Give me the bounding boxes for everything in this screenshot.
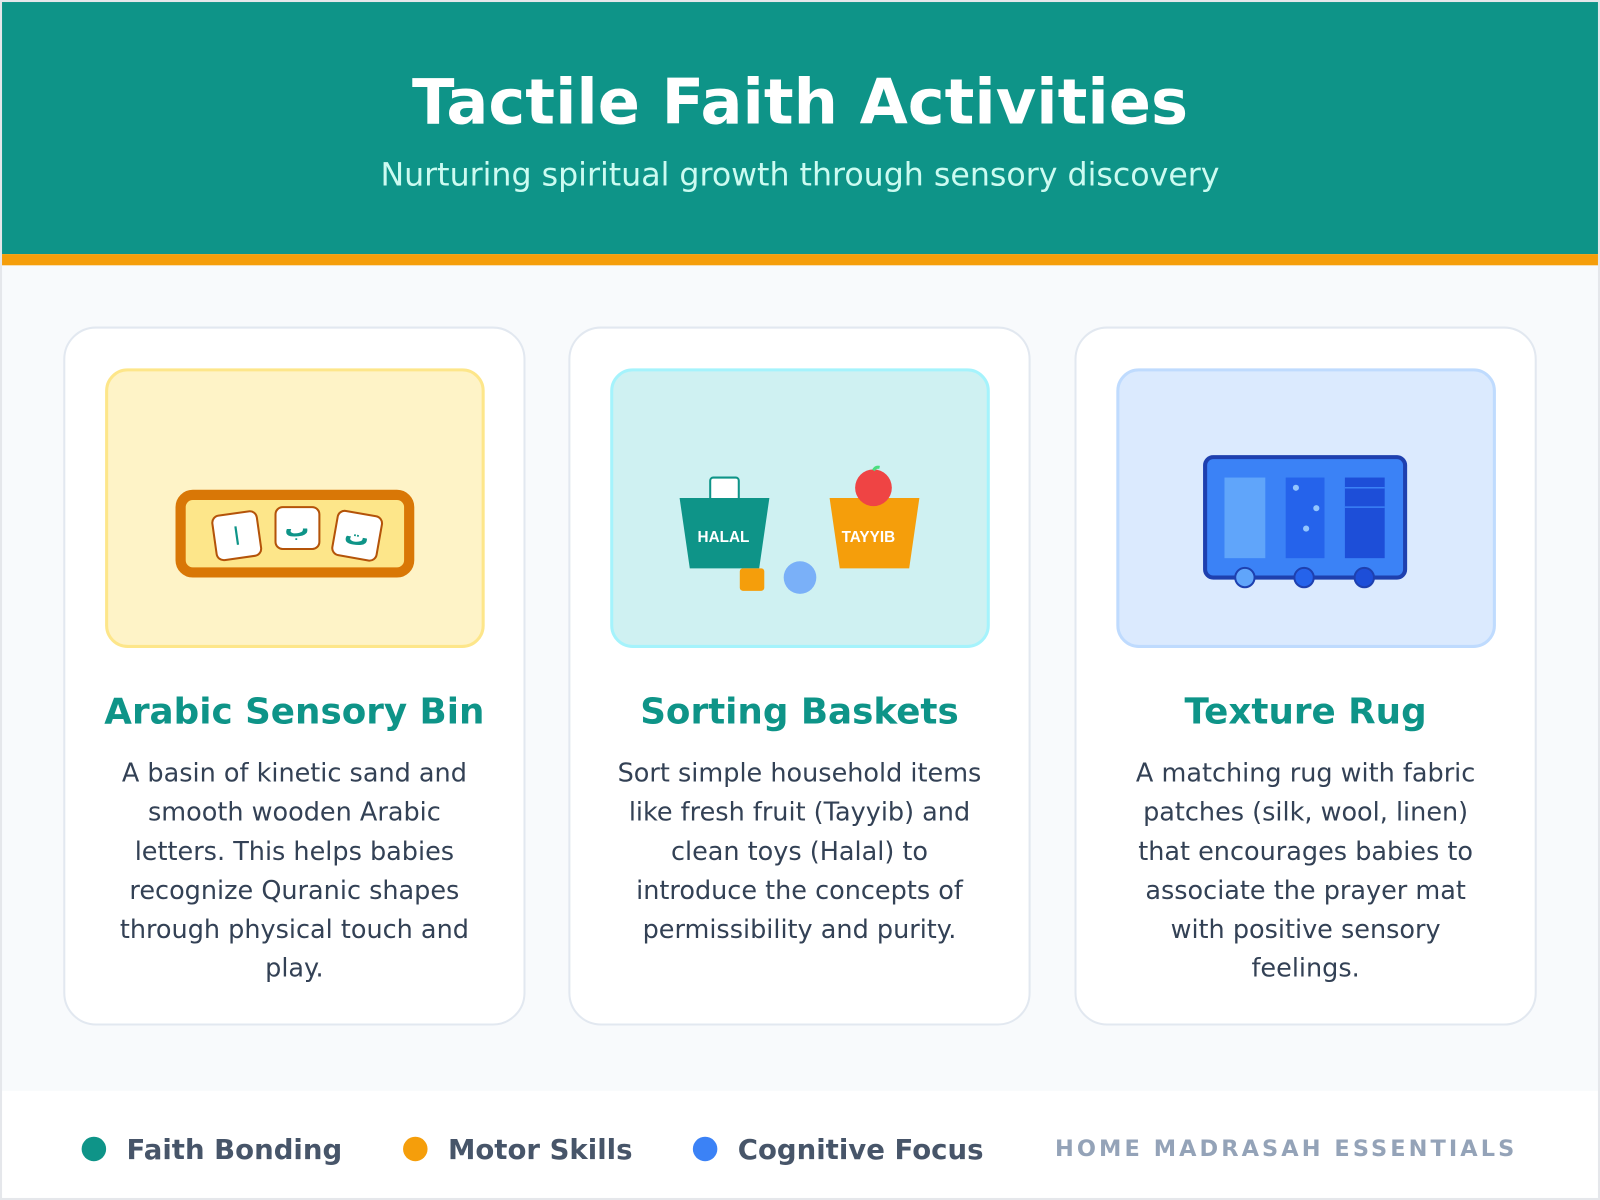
- icon: baskets: TAYYIB: [842, 529, 895, 546]
- heading: Sorting Baskets: [640, 692, 959, 733]
- heading: Arabic Sensory Bin: [104, 692, 484, 733]
- subtitle: Nurturing spiritual growth through sensory discovery: [380, 157, 1220, 194]
- text: Sort simple household items like fresh fruit (Tayyib) and clean toys (Halal) to introduce the concepts of permissibility and purity.: [618, 758, 981, 944]
- heading: Texture Rug: [1185, 692, 1427, 733]
- panel: arabic sensory bin: [63, 327, 526, 1026]
- icon: sensory bin: ب: [285, 514, 309, 543]
- icon: sensory bin: ت: [342, 520, 372, 553]
- legend: faith bonding: Faith Bonding: [127, 1135, 342, 1166]
- title: Tactile Faith Activities: [412, 66, 1188, 139]
- text: A basin of kinetic sand and smooth wooden Arabic letters. This helps babies recognize Quranic shapes through physical touch and play.: [120, 758, 469, 983]
- text: A matching rug with fabric patches (silk, wool, linen) that encourages babies to associate the prayer mat with positive sensory feelings.: [1136, 758, 1475, 983]
- legend: motor skills: Motor Skills: [448, 1135, 632, 1166]
- icon: baskets: [610, 368, 990, 648]
- icon: rug: [1116, 368, 1496, 648]
- legend: cognitive focus: Cognitive Focus: [738, 1135, 984, 1166]
- brand text: HOME MADRASAH ESSENTIALS: [1055, 1137, 1517, 1162]
- icon: baskets: HALAL: [698, 529, 749, 546]
- panel: texture rug: [1074, 327, 1537, 1026]
- footer: [0, 1091, 1600, 1200]
- icon: sensory bin: ا: [231, 522, 242, 551]
- icon: sensory bin: [105, 368, 485, 648]
- header: [0, 0, 1600, 254]
- panel: sorting baskets: [568, 327, 1031, 1026]
